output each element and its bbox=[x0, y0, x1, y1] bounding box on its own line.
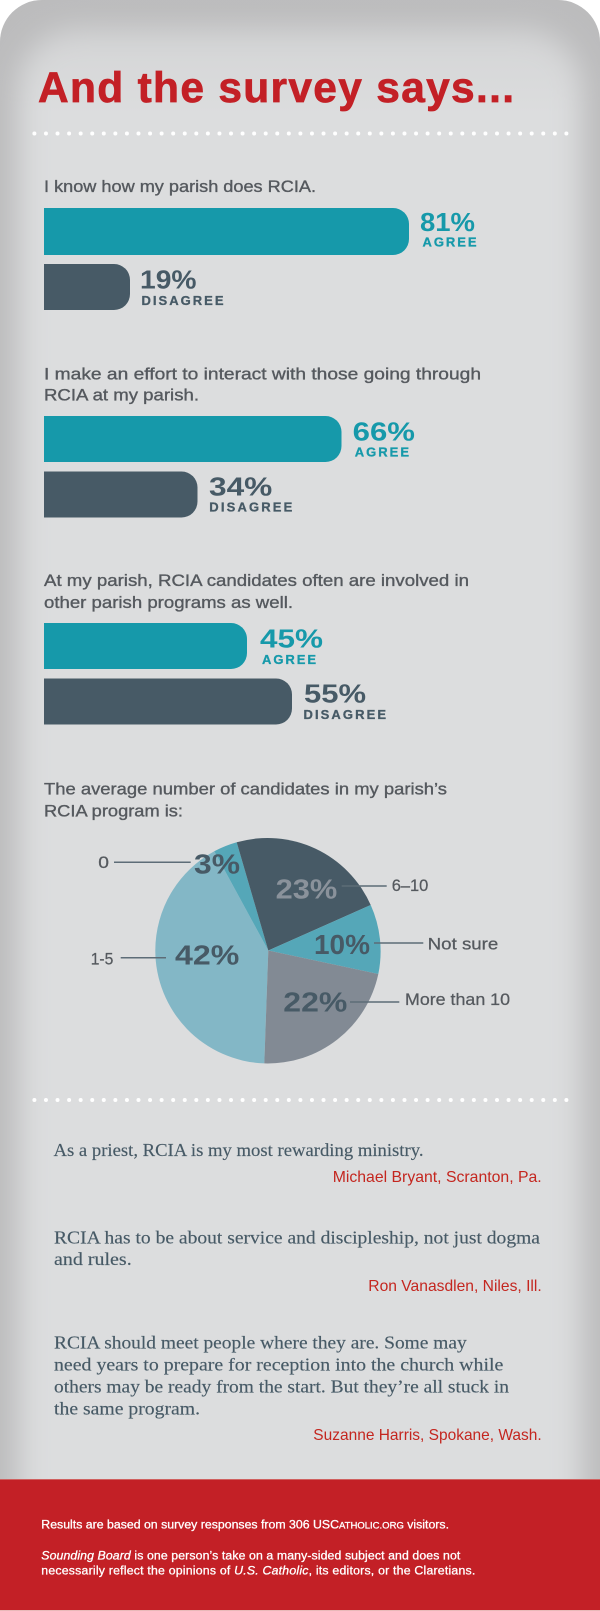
value: 55% disagree: DISAGREE bbox=[304, 707, 386, 722]
pie category labels: More than 10 bbox=[405, 990, 510, 1009]
quote 1: As a priest, RCIA is my most rewarding ministry. bbox=[54, 1140, 423, 1160]
quote 3: others may be ready from the start. But they’re all stuck in bbox=[54, 1377, 509, 1397]
footer note: disclaimer: Sounding Board is one person’s take on a many-sided subject and does not bbox=[41, 1548, 460, 1562]
quote 2: and rules. bbox=[54, 1249, 132, 1269]
panel: reader quotes bbox=[54, 1140, 542, 1444]
value: 45% agree: AGREE bbox=[262, 652, 316, 667]
value: 45% agree: 45% bbox=[260, 623, 323, 653]
pie value labels: 22% bbox=[283, 987, 347, 1018]
question text 3: other parish programs as well. bbox=[44, 593, 293, 612]
pie category labels bbox=[91, 853, 510, 1009]
footer note: disclaimer: necessarily reflect the opinions of U.S. Catholic, its editors, or the Claretians. bbox=[41, 1563, 475, 1577]
question text 3: At my parish, RCIA candidates often are involved in bbox=[44, 571, 469, 590]
panel: question 1 bbox=[44, 177, 477, 310]
value: 66% agree bbox=[353, 417, 415, 460]
bar: 81% agree bbox=[44, 208, 409, 255]
panel: question 4 with pie chart bbox=[44, 779, 510, 1063]
value: 19% disagree: DISAGREE bbox=[142, 293, 224, 308]
attribution 3: Suzanne Harris, Spokane, Wash. bbox=[313, 1427, 542, 1444]
quote 3: the same program. bbox=[54, 1398, 200, 1418]
value: 45% agree bbox=[260, 623, 323, 667]
pie chart bbox=[155, 838, 381, 1063]
value: 19% disagree bbox=[140, 265, 224, 308]
value: 55% disagree bbox=[304, 679, 386, 722]
question text 4: The average number of candidates in my parish’s bbox=[44, 779, 447, 798]
value: 81% agree bbox=[420, 207, 477, 250]
footer note: survey source: Results are based on survey responses from 306 USCATHOLIC.ORG visitors. bbox=[41, 1517, 449, 1531]
bar: 66% agree bbox=[44, 416, 342, 462]
question text 2: I make an effort to interact with those going through bbox=[44, 364, 481, 383]
panel: question 3 bbox=[44, 571, 469, 724]
bar: 45% agree bbox=[44, 623, 247, 669]
value: 34% disagree bbox=[209, 472, 293, 515]
value: 66% agree: AGREE bbox=[355, 445, 409, 460]
pie value labels: 42% bbox=[175, 939, 239, 970]
value: 81% agree: 81% bbox=[420, 207, 475, 237]
pie value labels bbox=[175, 848, 370, 1018]
dotted divider: top bbox=[34, 132, 567, 136]
panel: question 2 bbox=[44, 364, 481, 518]
pie leader lines bbox=[114, 862, 423, 1002]
question text 2: RCIA at my parish. bbox=[44, 386, 199, 405]
dotted divider: bottom bbox=[34, 1098, 567, 1102]
bar: 34% disagree bbox=[44, 472, 198, 518]
value: 34% disagree: DISAGREE bbox=[209, 500, 293, 515]
value: 81% agree: AGREE bbox=[422, 235, 477, 250]
attribution 1: Michael Bryant, Scranton, Pa. bbox=[333, 1169, 542, 1186]
value: 55% disagree: 55% bbox=[304, 679, 366, 709]
bar: 19% disagree bbox=[44, 264, 130, 310]
value: 19% disagree: 19% bbox=[140, 265, 196, 295]
value: 66% agree: 66% bbox=[353, 417, 415, 447]
quote 2: RCIA has to be about service and discipleship, not just dogma bbox=[54, 1227, 540, 1247]
quote 3: RCIA should meet people where they are. Some may bbox=[54, 1332, 467, 1352]
attribution 2: Ron Vanasdlen, Niles, Ill. bbox=[368, 1278, 542, 1295]
value: 34% disagree: 34% bbox=[209, 472, 272, 502]
pie value labels: 3% bbox=[194, 848, 240, 879]
panel: red footer bbox=[0, 1479, 600, 1611]
title: And the survey says... bbox=[38, 65, 514, 112]
question text 1: I know how my parish does RCIA. bbox=[44, 177, 316, 196]
pie category labels: 6–10 bbox=[392, 876, 428, 895]
pie category labels: 1-5 bbox=[91, 950, 113, 969]
bar: 55% disagree bbox=[44, 678, 292, 724]
pie value labels: 10% bbox=[314, 929, 370, 960]
pie category labels: Not sure bbox=[428, 934, 498, 953]
quote 3: need years to prepare for reception into the church while bbox=[54, 1355, 504, 1375]
pie value labels: 23% bbox=[276, 873, 337, 904]
pie category labels: 0 bbox=[98, 853, 109, 872]
question text 4: RCIA program is: bbox=[44, 802, 183, 821]
